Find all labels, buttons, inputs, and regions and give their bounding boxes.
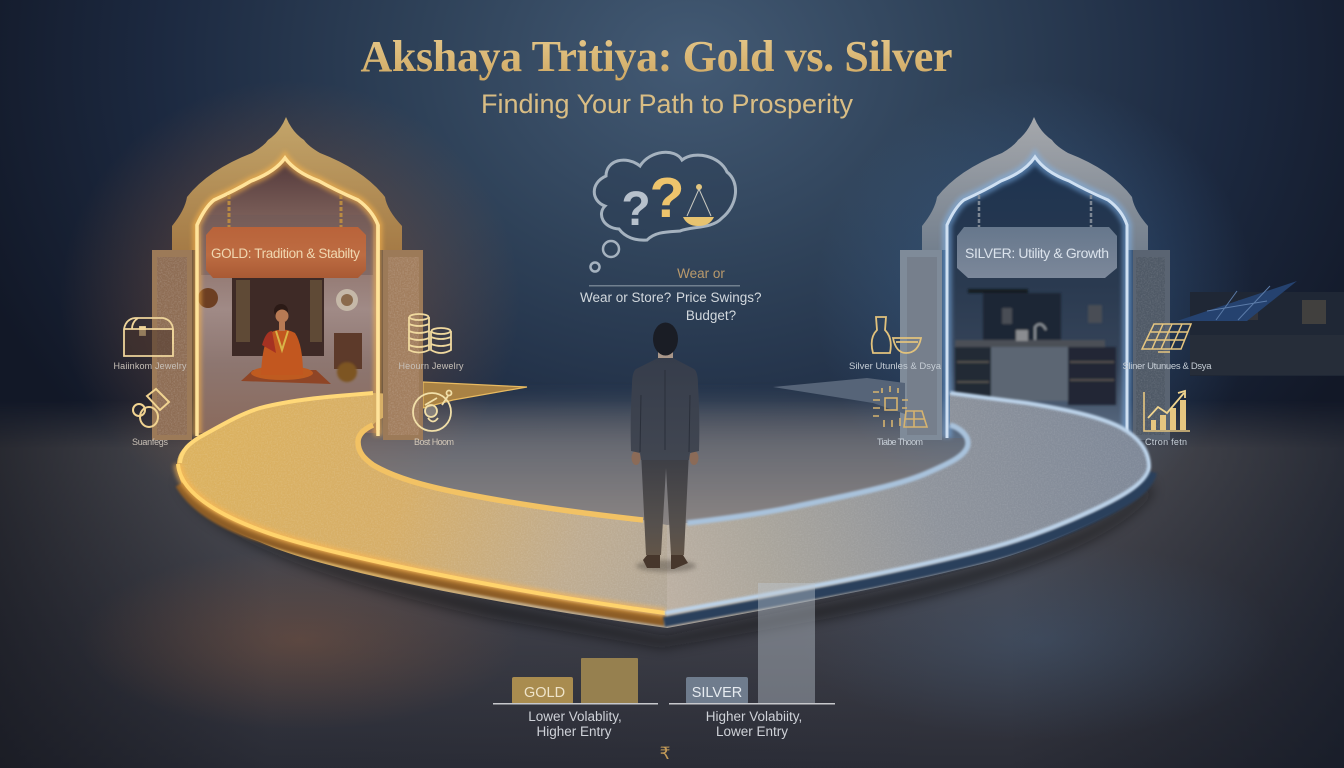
shoes: [643, 555, 688, 569]
legs: [641, 452, 689, 555]
question: wear or: Wear or: [677, 266, 725, 281]
gold sign: GOLD: Tradition & Stabilty: [211, 246, 360, 261]
silver left icons: [849, 317, 942, 447]
woman seated: [251, 304, 313, 380]
gold right rim over pillar: [376, 225, 380, 430]
silver arch frame: [922, 117, 1148, 250]
solar house background: [1177, 281, 1344, 376]
panel: volatility comparison: [493, 583, 835, 764]
gold bars: [493, 658, 658, 704]
label: chest: Haiinkom Jewelry: [114, 361, 187, 371]
icon: silver question mark: ?: [621, 183, 651, 236]
questions text: Budget?: [686, 308, 736, 323]
questions text: Price Swings?: [676, 290, 762, 305]
gold left icons: [114, 318, 187, 447]
icon: rupee: ₹: [660, 744, 670, 764]
gold top edge: [180, 393, 373, 463]
gold front edge: [180, 484, 665, 621]
thought cloud: [590, 152, 736, 272]
panel: gold archway: [152, 117, 402, 440]
silver doorway scene: [947, 157, 1127, 438]
silver caption: Lower Entry: [716, 724, 788, 739]
subtitle: Finding Your Path to Prosperity: [481, 89, 854, 119]
silver outer side band: [664, 472, 1152, 622]
icon: coin face: [413, 390, 452, 431]
silver inner edge: [687, 425, 968, 523]
panel: silver archway: [900, 117, 1170, 440]
label: bangles: Suanfegs: [132, 437, 168, 447]
icon: treasure chest: [124, 318, 173, 356]
silver right pillar: [1133, 250, 1170, 440]
icon: balance scale: [683, 184, 714, 226]
gold caption: Lower Volablity,: [528, 709, 622, 724]
silver chains: [979, 195, 1091, 230]
person standing: [631, 322, 699, 572]
jacket: [631, 358, 699, 460]
gold glowing arch rim: [197, 158, 378, 436]
gold path tip: [423, 382, 527, 408]
panel: forked path: [177, 378, 1152, 648]
silver sign: [957, 227, 1117, 278]
icon: growth chart: [1144, 391, 1190, 431]
silver front edge: [665, 393, 1149, 613]
gold doorway scene: [197, 158, 378, 433]
hands: [632, 451, 640, 465]
divider under question: [589, 285, 740, 286]
silver path tip: [773, 378, 905, 414]
silver caption: Higher Volabiity,: [706, 709, 802, 724]
silver right icons: [1122, 324, 1212, 447]
title: Akshaya Tritiya: Gold vs. Silver: [360, 32, 952, 81]
icon: bangles: [133, 389, 169, 427]
gold arch frame: [172, 117, 402, 250]
silver bars: SILVER: [692, 685, 742, 701]
icon: coin stacks: [409, 314, 451, 353]
label: circuit: Tiabe Thoom: [877, 437, 923, 447]
silver path branch: [664, 378, 1152, 628]
gold right icons: [398, 314, 464, 447]
gold sign: [206, 227, 366, 278]
icon: vessel and bowl: [872, 317, 921, 353]
head: [653, 322, 678, 356]
gold caption: Higher Entry: [536, 724, 612, 739]
silver bars: [669, 583, 835, 704]
gold path branch: [177, 382, 667, 628]
label: coin face: Bost Hoom: [414, 437, 454, 447]
gold inner edge: [358, 425, 643, 520]
label: vessel: Silver Utunles & Dsya: [849, 361, 942, 372]
path shadow: [177, 475, 1152, 648]
icon: gold question mark: ?: [650, 166, 684, 230]
silver glowing arch rim: [947, 157, 1127, 438]
gold left pillar: [152, 250, 192, 440]
gold right pillar: [383, 250, 423, 440]
label: coins: Heourn Jewelry: [398, 361, 464, 371]
gold chains: [229, 195, 341, 230]
silver rim over path: [946, 225, 948, 432]
silver caption: [706, 709, 802, 739]
label: solar: Sliner Utunues & Dsya: [1122, 361, 1212, 372]
gold bars: GOLD: [524, 685, 565, 701]
questions text: Wear or Store?: [580, 290, 671, 305]
icon: circuit and panel: [873, 386, 927, 427]
icon: solar panel: [1142, 324, 1191, 352]
label: chart: Ctron fetn: [1145, 437, 1187, 447]
silver left pillar: [900, 250, 942, 440]
silver sign: SILVER: Utility & Growth: [965, 245, 1109, 261]
gold caption: [528, 709, 622, 739]
questions text: [580, 290, 762, 323]
neck: [658, 348, 673, 359]
